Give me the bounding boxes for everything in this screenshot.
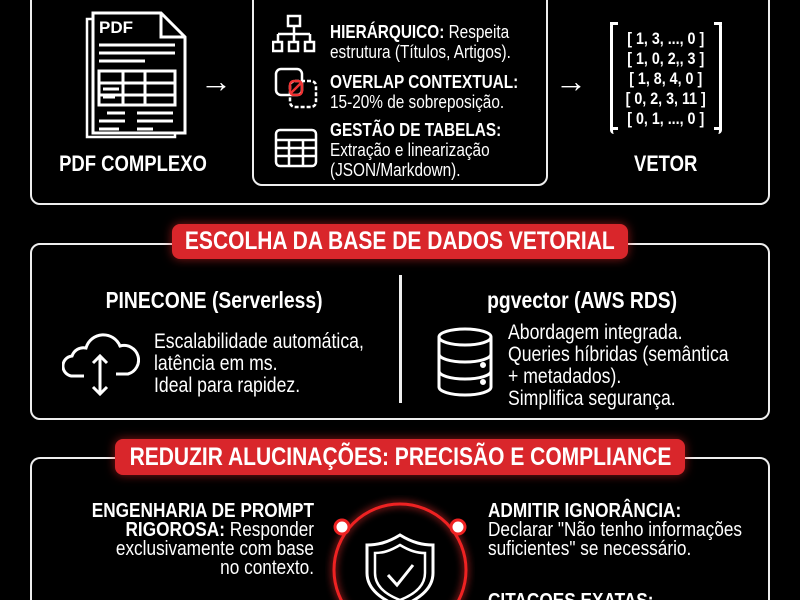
divider [399,275,402,403]
text: pdf complexo: PDF COMPLEXO [59,151,207,176]
text: prompt engineering: ENGENHARIA DE PROMPT [92,499,314,522]
text: gestao de tabelas: (JSON/Markdown). [330,159,461,180]
icon: vector matrix: [ 1, 0, 2,, 3 ] [627,49,704,68]
text: prompt engineering [92,499,314,579]
panel: vector database choice [30,243,770,420]
icon: pdf document [86,12,186,138]
text: prompt engineering: exclusivamente com base [116,537,314,560]
text: gestao de tabelas [330,119,501,180]
text: pinecone description: latência em ms. [154,352,278,375]
text: overlap contextual: 15-20% de sobreposição. [330,91,504,112]
text: pinecone description [154,330,364,397]
icon: vector matrix: [ 1, 8, 4, 0 ] [629,69,702,88]
icon: table [274,128,318,168]
icon: vector matrix: [ 0, 1, ..., 0 ] [628,109,704,128]
icon: cloud [62,333,140,396]
text: gestao de tabelas: GESTÃO DE TABELAS: [330,119,501,140]
icon: vector matrix: [ 1, 3, ..., 0 ] [628,29,704,48]
text: pgvector heading: pgvector (AWS RDS) [487,287,677,313]
text: prompt engineering: RIGOROSA: Responder [125,518,314,541]
text: pgvector description: Queries híbridas (semântica [508,343,729,366]
text: hierarquico [330,21,511,62]
text: pinecone heading: PINECONE (Serverless) [106,287,322,313]
text: pgvector description: Simplifica segurança. [508,387,676,410]
icon: vector matrix [610,22,722,134]
text: pgvector description: + metadados). [508,365,621,388]
icon: hierarchy [272,14,316,52]
text: hierarquico: estrutura (Títulos, Artigos). [330,41,511,62]
heading: escolha da base: ESCOLHA DA BASE DE DADOS VETORIAL [185,227,615,255]
text: pgvector description: Abordagem integrada. [508,321,683,344]
text: admitir ignorancia: ADMITIR IGNORÂNCIA: [488,499,681,522]
text: prompt engineering: no contexto. [220,556,314,579]
text: admitir ignorancia: suficientes" se necessário. [488,537,691,560]
icon: vector matrix: [ 0, 2, 3, 11 ] [626,89,706,108]
text: overlap contextual [330,71,518,112]
arrow: chunking to vector: → [555,63,587,99]
icon: database [438,328,492,396]
panel: top pipeline [30,0,770,205]
heading: reduzir alucinacoes: REDUZIR ALUCINAÇÕES: PRECISÃO E COMPLIANCE [129,443,671,471]
text: admitir ignorancia: Declarar "Não tenho informações [488,518,742,541]
text: admitir ignorancia [488,498,742,560]
text: hierarquico: HIERÁRQUICO: Respeita [330,21,509,42]
text: vetor: VETOR [634,151,698,176]
text: pgvector description [508,321,729,410]
icon: pdf document: PDF [99,18,133,37]
panel: chunking strategies [252,0,548,186]
panel: reduce hallucinations [30,457,770,600]
icon: overlap [274,68,318,108]
icon: shield in red ring [326,496,474,600]
text: pinecone description: Escalabilidade automática, [154,330,364,353]
text: overlap contextual: OVERLAP CONTEXTUAL: [330,71,518,92]
text: gestao de tabelas: Extração e linearização [330,139,490,160]
arrow: pdf to chunking: → [200,63,232,99]
text: pinecone description: Ideal para rapidez. [154,374,300,397]
